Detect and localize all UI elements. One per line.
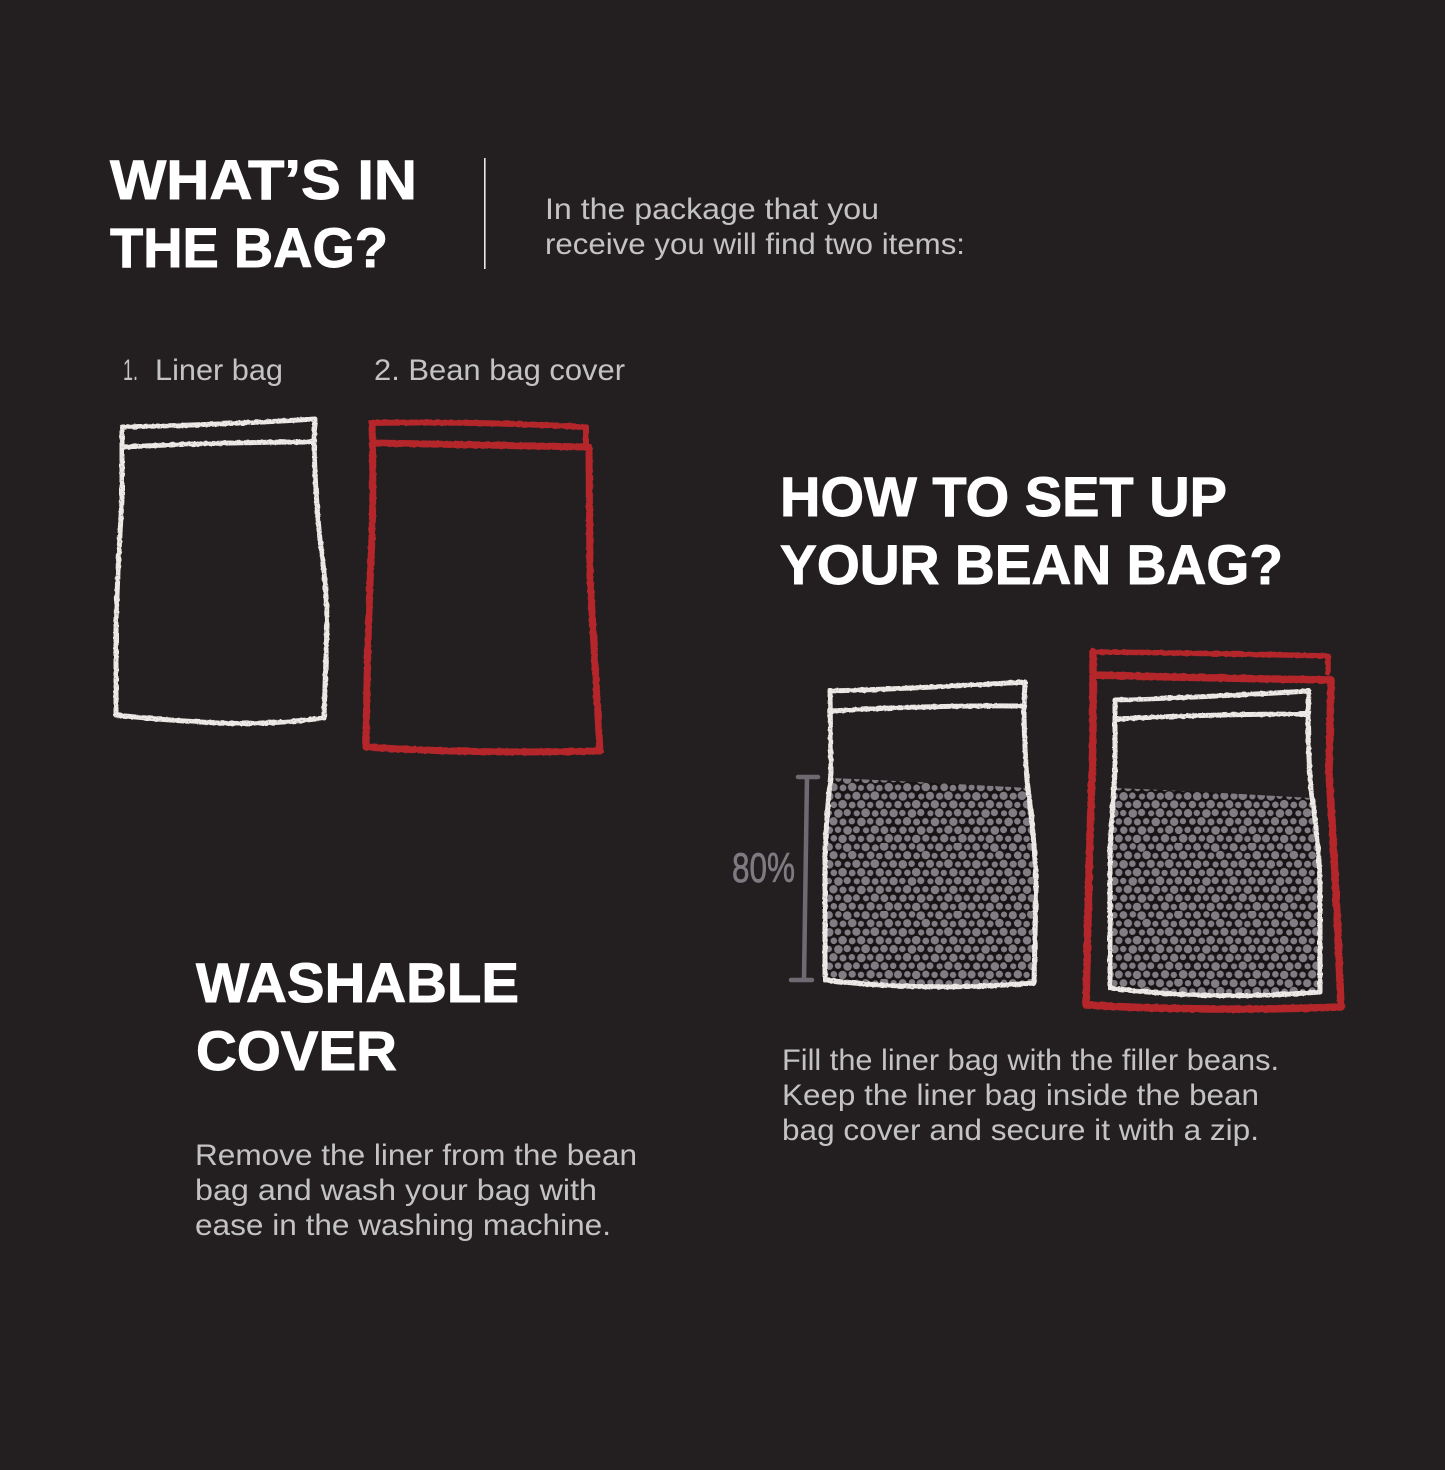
label: liner bag: Liner bag: [155, 354, 283, 387]
intro text: [545, 193, 965, 261]
label: bean bag cover: 2. Bean bag cover: [374, 354, 625, 387]
washing instructions: ease in the washing machine.: [195, 1209, 611, 1242]
cover outline: [1086, 652, 1341, 1009]
washing instructions: Remove the liner from the bean: [195, 1139, 637, 1172]
heading: washable cover: COVER: [196, 1019, 397, 1082]
heading: what's in the bag: [110, 148, 417, 279]
heading: what's in the bag: WHAT’S IN: [110, 148, 417, 211]
intro text: receive you will find two items:: [545, 228, 965, 261]
icon: bean bag cover outline: [366, 422, 600, 752]
heading: what's in the bag: THE BAG?: [110, 216, 388, 279]
icon: liner bag inside cover: [1086, 652, 1341, 1009]
washing instructions: bag and wash your bag with: [195, 1174, 597, 1207]
heading: how to set up: HOW TO SET UP: [780, 465, 1227, 528]
heading: how to set up: YOUR BEAN BAG?: [780, 533, 1283, 596]
measure bar: 80 percent: 80%: [732, 844, 795, 891]
filler beans: [1111, 788, 1320, 994]
heading: washable cover: [196, 951, 519, 1082]
setup instructions: Keep the liner bag inside the bean: [782, 1079, 1259, 1112]
icon: liner bag outline: [116, 419, 327, 723]
heading: how to set up: [780, 465, 1283, 596]
measure bar: 80 percent: [732, 777, 818, 980]
divider: [484, 158, 486, 269]
washing instructions: [195, 1139, 637, 1242]
heading: washable cover: WASHABLE: [196, 951, 519, 1014]
liner outline: [1110, 691, 1320, 996]
setup instructions: Fill the liner bag with the filler beans.: [782, 1044, 1279, 1077]
setup instructions: [782, 1044, 1279, 1147]
setup instructions: bag cover and secure it with a zip.: [782, 1114, 1259, 1147]
intro text: In the package that you: [545, 193, 879, 226]
label: liner bag: 1.: [123, 354, 138, 387]
icon: liner bag filled with beans: [825, 682, 1036, 987]
